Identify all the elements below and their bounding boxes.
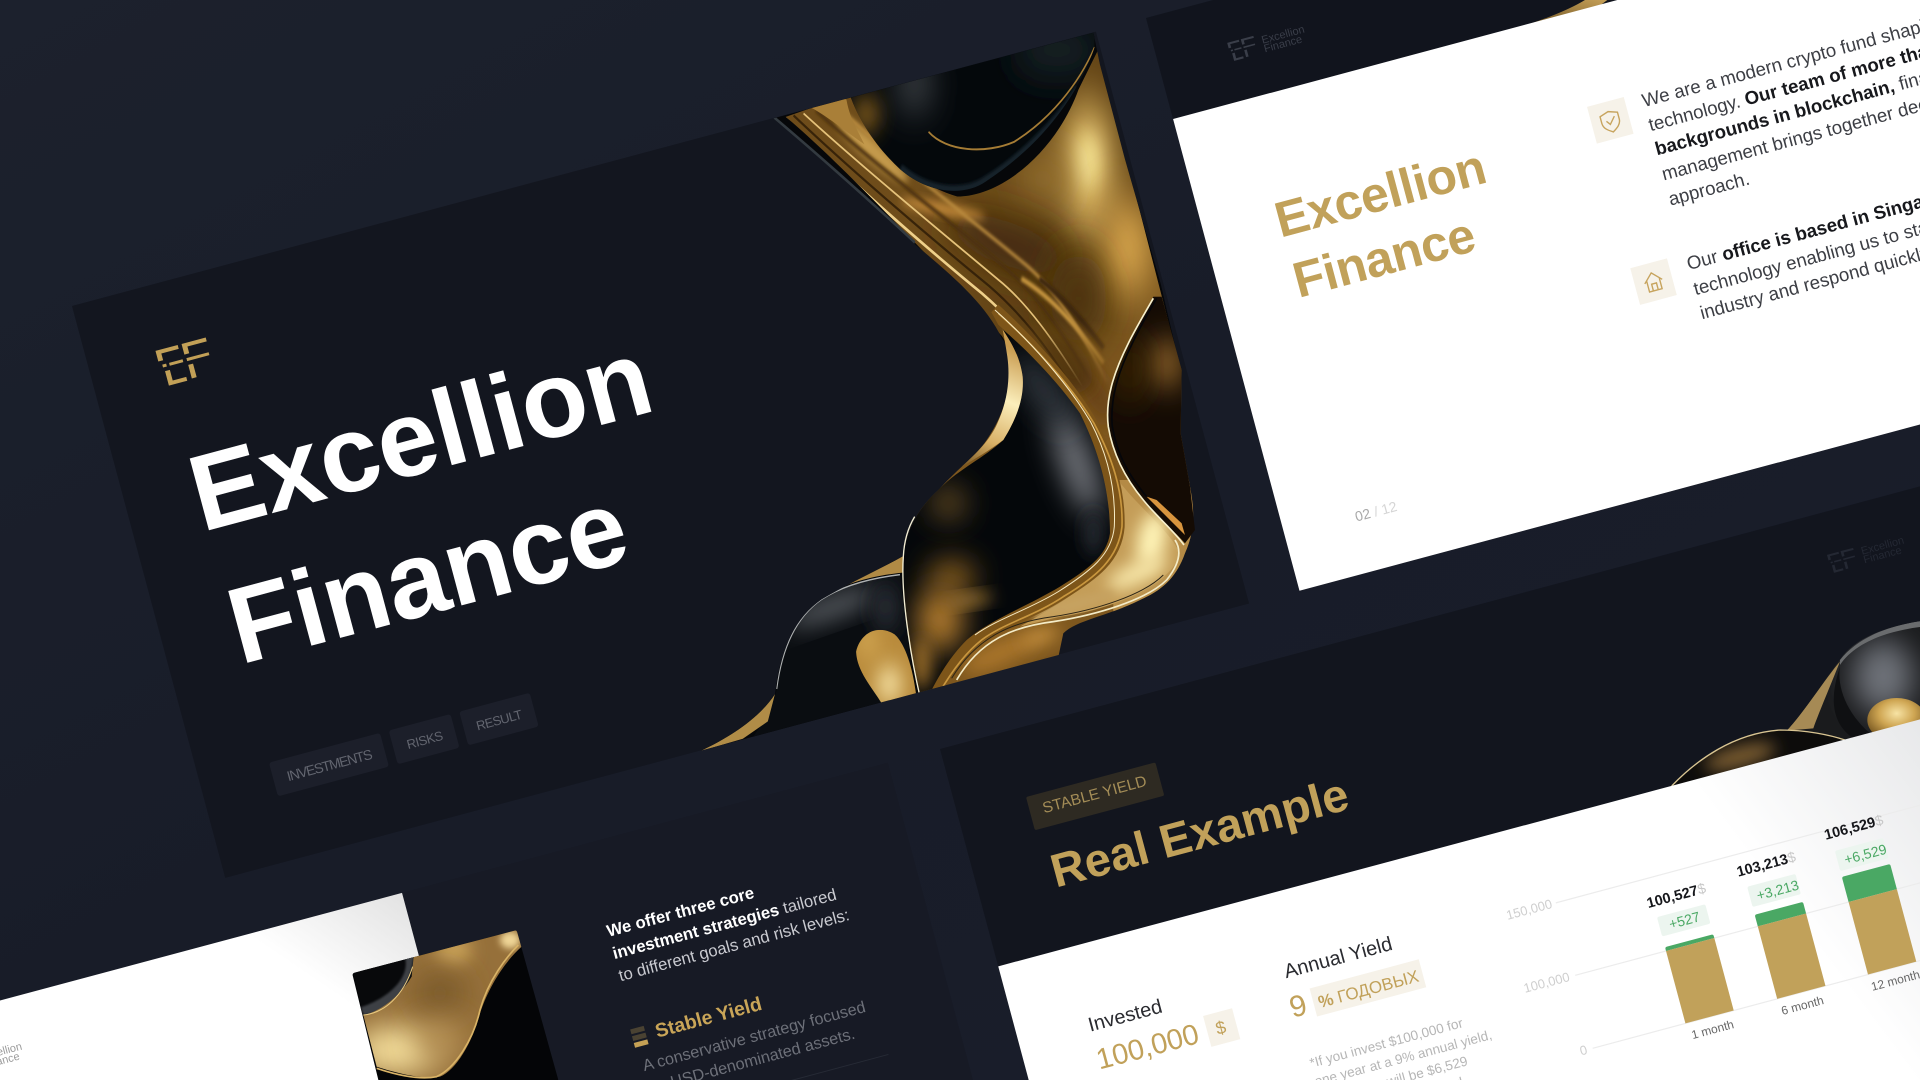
slide background xyxy=(940,475,1920,1080)
tag: result xyxy=(459,693,539,745)
panel: real example slide xyxy=(940,475,1920,1080)
intro text: We offer three core xyxy=(605,883,756,941)
slide header background xyxy=(1146,0,1920,591)
lower folds of the artwork xyxy=(897,293,1203,707)
stat: invested xyxy=(1085,978,1240,1076)
image: gold liquid thumbnail xyxy=(352,930,558,1080)
bar: 1 month xyxy=(1645,881,1743,1044)
panel: about slide xyxy=(1146,0,1920,591)
title: Excellion xyxy=(177,315,664,554)
brand name: Excellion xyxy=(1860,535,1905,558)
bar: 12 month: +6,529 xyxy=(1842,841,1888,867)
strategy heading: Stable Yield xyxy=(653,993,764,1043)
icon: EF logo xyxy=(155,337,215,387)
gold rim xyxy=(962,329,1023,467)
tag: investments xyxy=(269,733,389,796)
right dark lobe xyxy=(1108,296,1195,544)
bar: 1 month: 100,527$ xyxy=(1645,881,1708,912)
heading: Finance xyxy=(1287,206,1481,309)
stat: annual yield: 9 xyxy=(1286,988,1311,1025)
liquid gold artwork xyxy=(702,32,1195,750)
white area xyxy=(0,893,556,1080)
panel: cover slide xyxy=(72,0,1249,878)
strategy description: A conservative strategy focused xyxy=(641,998,868,1075)
tag: stable yield xyxy=(1026,762,1164,830)
gold ribbon tail xyxy=(1512,0,1610,30)
footnote: *If you invest $100,000 for xyxy=(1308,1015,1465,1071)
icon: small logo xyxy=(1227,36,1258,61)
stat: annual yield: % ГОДОВЫХ xyxy=(1316,967,1421,1012)
title: Finance xyxy=(215,465,640,687)
bar: 6 month xyxy=(1735,849,1835,1020)
bar: 12 month xyxy=(1823,813,1920,995)
tag: result: RESULT xyxy=(475,707,524,733)
brand name: Finance xyxy=(1263,34,1304,55)
black bowl at top xyxy=(850,33,1094,191)
stat: invested: $ xyxy=(1213,1017,1228,1039)
gold nugget xyxy=(856,630,916,702)
bar: 12 month: 106,529$ xyxy=(1823,813,1885,844)
lower right ribbon xyxy=(1113,480,1193,613)
brand name: Finance xyxy=(1862,545,1903,566)
tag: stable yield: STABLE YIELD xyxy=(1041,773,1149,817)
icon: home xyxy=(1630,258,1677,305)
slide background xyxy=(72,32,1249,878)
slide background xyxy=(0,763,1041,1080)
stat: invested: Invested xyxy=(1086,996,1165,1037)
central black blob xyxy=(904,330,1110,692)
bar chart xyxy=(1503,764,1920,1080)
icon: small logo xyxy=(1827,548,1858,573)
intro text: investment strategies tailored xyxy=(611,885,839,963)
stat: annual yield: Annual Yield xyxy=(1282,933,1395,983)
liquid artwork xyxy=(1670,617,1920,790)
tag: risks: RISKS xyxy=(405,728,445,752)
bar: 1 month: 1 month xyxy=(1690,1017,1735,1042)
stat: annual yield xyxy=(1278,927,1427,1025)
tag: risks xyxy=(389,714,460,764)
gold tail xyxy=(700,694,775,751)
bar chart: 150,000 xyxy=(1504,896,1554,923)
paragraph: about: approach. xyxy=(1666,168,1752,210)
bar: 6 month: +3,213 xyxy=(1755,877,1801,903)
brand name: Excellion xyxy=(1260,24,1306,47)
bar chart: 0 xyxy=(1578,1042,1589,1058)
stat: invested: 100,000 xyxy=(1093,1018,1202,1076)
icon: shield xyxy=(1587,97,1634,144)
tag: investments: INVESTMENTS xyxy=(285,746,374,784)
bar: 6 month: 103,213$ xyxy=(1735,849,1798,881)
panel: strategies slide xyxy=(0,763,1041,1080)
bar chart: 100,000 xyxy=(1522,969,1571,996)
heading: Real Example xyxy=(1045,767,1354,897)
white content area xyxy=(998,692,1920,1080)
page number: 02 / 12 xyxy=(1353,498,1399,525)
icon: three bars xyxy=(630,1026,649,1048)
heading: Excellion xyxy=(1269,138,1492,248)
white content area xyxy=(1173,0,1920,591)
intro text: to different goals and risk levels: xyxy=(616,905,851,985)
bar: 12 month: 12 month xyxy=(1870,967,1920,994)
lower left black sphere xyxy=(787,576,906,649)
bar: 6 month: 6 month xyxy=(1780,993,1825,1018)
slide content xyxy=(154,229,729,798)
bar: 1 month: +527 xyxy=(1667,908,1702,932)
